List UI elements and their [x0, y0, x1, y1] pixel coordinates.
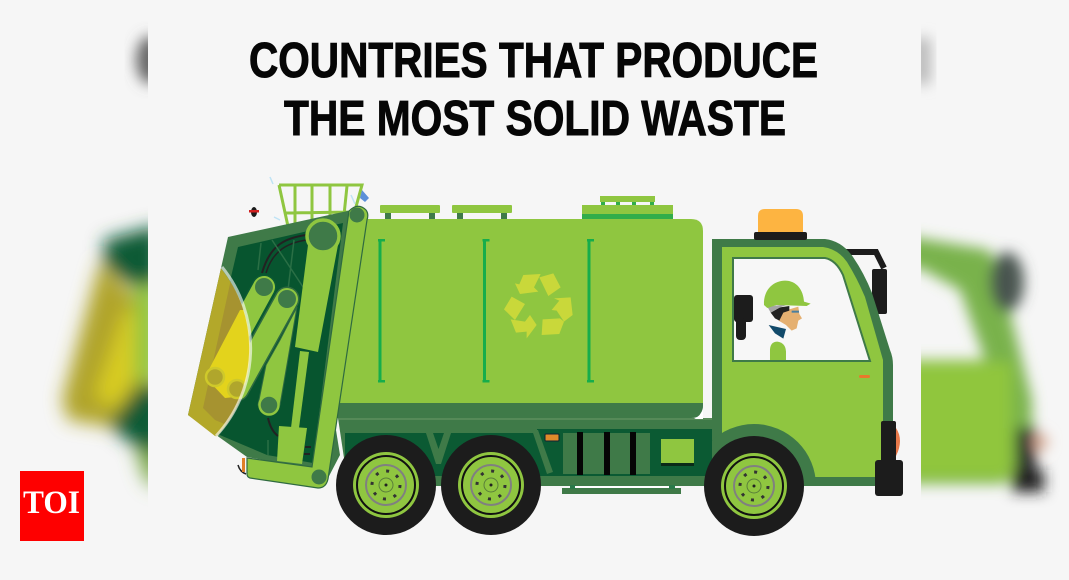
blurred backdrop: left side [62, 36, 165, 490]
TOI logo: TOI [23, 485, 80, 521]
rear hopper [188, 210, 355, 480]
wheel 1 [336, 435, 436, 535]
title [249, 34, 818, 146]
TOI logo [20, 471, 84, 541]
side mirror [846, 252, 887, 314]
main cylinder [277, 220, 339, 464]
lifting arms [215, 278, 297, 414]
seat headrest [734, 295, 753, 340]
tank ribs [378, 239, 594, 382]
water splash [270, 177, 369, 220]
garbage truck illustration [188, 177, 903, 548]
title: THE MOST SOLID WASTE [284, 92, 786, 146]
cab [712, 239, 893, 486]
wheel arch [712, 424, 816, 477]
wheel 3 [704, 436, 804, 536]
basket [279, 185, 362, 231]
front bumper [875, 421, 903, 496]
fly [249, 207, 259, 217]
door handle [859, 375, 870, 378]
cab window [733, 258, 870, 361]
lids on tank roof [380, 196, 673, 219]
rear door frame [247, 206, 368, 488]
title: COUNTRIES THAT PRODUCE [249, 34, 818, 88]
icon: recycling symbol [504, 273, 573, 338]
chassis [338, 418, 716, 494]
wheel 2 [441, 435, 541, 535]
tank body [335, 219, 714, 420]
blurred backdrop: right side [900, 38, 1048, 492]
engine panels [545, 432, 694, 475]
roof beacon [754, 209, 807, 240]
driver [764, 281, 811, 360]
yellow glass cover [188, 266, 252, 436]
hydraulic hoses and struts [258, 235, 306, 455]
